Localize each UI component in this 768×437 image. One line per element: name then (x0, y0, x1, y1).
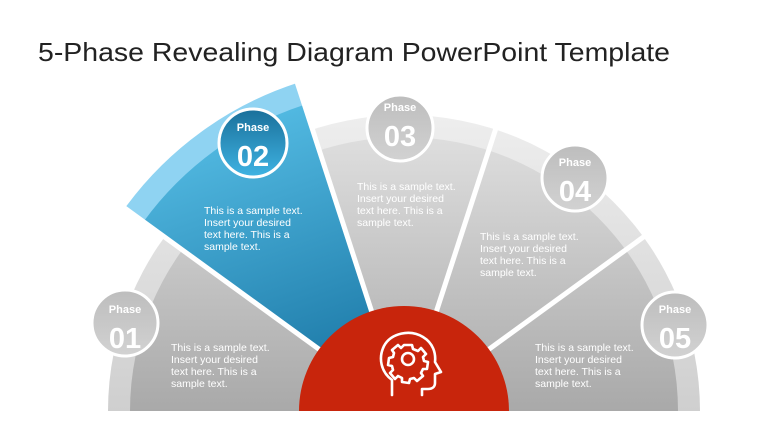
text: phase 03: text here. This is a (357, 205, 443, 217)
phase 04 circle: 04 (559, 176, 591, 208)
phase 04 circle: Phase (559, 157, 591, 169)
text: phase 02: This is a sample text. (204, 205, 303, 217)
text: phase 01: This is a sample text. (171, 342, 270, 354)
phase 02 circle (219, 109, 287, 177)
text: phase 05: This is a sample text. (535, 342, 634, 354)
phase 04 circle (542, 145, 608, 211)
text: phase 04: Insert your desired (480, 243, 567, 255)
text: phase 02: Insert your desired (204, 217, 291, 229)
icon: head with gear (381, 333, 441, 395)
title: 5-Phase Revealing Diagram PowerPoint Template (38, 37, 670, 67)
text: phase 04: This is a sample text. (480, 231, 579, 243)
phase 01 circle: 01 (109, 323, 141, 355)
phase 03 circle (367, 95, 433, 161)
phase 05 circle: Phase (659, 304, 691, 316)
panel: phase 02 blue segment (125, 83, 404, 411)
phase 05 circle: 05 (659, 323, 691, 355)
red center semicircle (299, 306, 509, 411)
phase 01 circle (92, 290, 158, 356)
outer ring (108, 115, 700, 411)
text: phase 05: text here. This is a (535, 366, 621, 378)
text: phase 01: Insert your desired (171, 354, 258, 366)
text: phase 05: Insert your desired (535, 354, 622, 366)
phase 02 circle: Phase (237, 122, 269, 134)
text: phase 03: This is a sample text. (357, 181, 456, 193)
text: phase 03: Insert your desired (357, 193, 444, 205)
text: phase 01: text here. This is a (171, 366, 257, 378)
text: phase 05: sample text. (535, 378, 592, 390)
text: phase 01: sample text. (171, 378, 228, 390)
gray segments (130, 137, 678, 411)
phase 03 circle: Phase (384, 102, 416, 114)
text: phase 02: sample text. (204, 241, 261, 253)
phase 02 circle: 02 (237, 141, 269, 173)
phase 01 circle: Phase (109, 304, 141, 316)
text: phase 02: text here. This is a (204, 229, 290, 241)
text: phase 03: sample text. (357, 217, 414, 229)
phase 03 circle: 03 (384, 121, 416, 153)
text: phase 04: sample text. (480, 267, 537, 279)
phase 05 circle (642, 292, 708, 358)
text: phase 04: text here. This is a (480, 255, 566, 267)
